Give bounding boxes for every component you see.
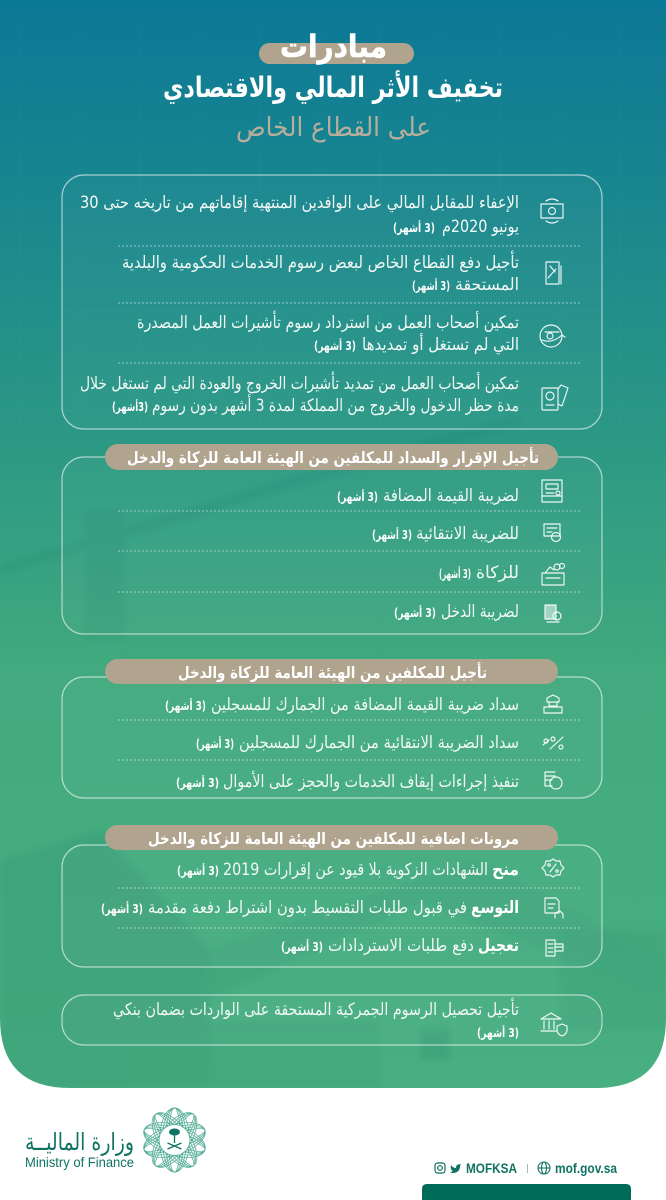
logo rosette (139, 1105, 210, 1175)
item: residency fee exemption (80, 193, 519, 237)
item: excise tax (372, 524, 519, 544)
logo arabic name: وزارة الماليــة (25, 1128, 134, 1156)
panel: customs deferral (62, 659, 602, 798)
item: refund requests: دفع طلبات الاستردادات (328, 936, 474, 956)
logo english name: Ministry of Finance (25, 1154, 134, 1170)
icon: hand with note (546, 262, 561, 284)
heading pill: تأجيل للمكلفين من الهيئة العامة للزكاة والدخل (178, 662, 487, 682)
panel: additional flexibility (62, 825, 602, 967)
icon: banknote cycle (541, 199, 563, 223)
item: income tax: (3 أشهر) (394, 605, 436, 620)
social handles (435, 1160, 617, 1176)
icon: document with coins (545, 605, 561, 622)
item: excise tax: للضريبة الانتقائية (416, 524, 519, 544)
item: zakat certificates: منح (492, 860, 519, 880)
item: zakat (439, 563, 519, 583)
heading pill (105, 659, 558, 684)
icon: globe (538, 1162, 550, 1174)
icon: percent badge (542, 859, 564, 877)
icon: checklist in hand (545, 898, 563, 918)
item: exit and re-entry visas: (3أشهر) (112, 399, 148, 414)
item: zakat certificates: (3 أشهر) (177, 863, 219, 878)
item: VAT payment: سداد ضريبة القيمة المضافة من الجمارك للمسجلين (211, 695, 519, 715)
item: refund requests (281, 936, 519, 956)
item: instalment requests: التوسع (471, 898, 519, 918)
heading pill: مرونات اضافية للمكلفين من الهيئة العامة للزكاة والدخل (148, 829, 519, 848)
item: exit and re-entry visas (80, 371, 519, 416)
icon: percent (543, 737, 563, 749)
subtitle: على القطاع الخاص (236, 113, 431, 143)
icon: bank with shield (541, 1013, 567, 1036)
item: zakat certificates: الشهادات الزكوية بلا قيود عن إقرارات 2019 (223, 860, 488, 880)
item: residency fee exemption: (3 أشهر) (393, 220, 435, 235)
logo: ministry of finance (25, 1105, 210, 1175)
item: value added tax: (3 أشهر) (337, 489, 378, 504)
item: government fees deferral: المستحقة (455, 275, 519, 295)
title word: مبادرات (280, 29, 387, 65)
icon: passport and ticket (542, 385, 568, 410)
item: government fees deferral: (3 أشهر) (412, 278, 450, 293)
item: VAT payment: (3 أشهر) (165, 698, 206, 713)
icon: desk with plant (542, 564, 564, 585)
icon: form and gear (544, 524, 560, 542)
item: value added tax (337, 486, 519, 506)
item: income tax (394, 602, 519, 622)
icon: twitter (450, 1164, 461, 1173)
heading pill (105, 825, 558, 850)
item: zakat: للزكاة (476, 563, 519, 583)
item: work visa refund: تمكين أصحاب العمل من استرداد رسوم تأشيرات العمل المصدرة (137, 310, 519, 333)
item: instalment requests: في قبول طلبات التقسيط بدون اشتراط دفعة مقدمة (148, 898, 467, 918)
item: income tax: لضريبة الدخل (441, 602, 519, 622)
item: work visa refund: (3 أشهر) (314, 338, 356, 353)
item: suspension of measures: (3 أشهر) (176, 775, 219, 790)
title block (163, 29, 503, 143)
item: refund requests: تعجيل (478, 936, 519, 956)
icon: instagram (435, 1163, 445, 1173)
item: excise payment: (3 أشهر) (196, 736, 234, 751)
item: excise payment: سداد الضريبة الانتقائية من الجمارك للمسجلين (239, 733, 519, 753)
icon: customs desk (544, 695, 562, 713)
item: refund requests: (3 أشهر) (281, 939, 323, 954)
panel: customs duties (62, 995, 602, 1045)
item: work visa refund: التي لم تستغل أو تمديدها (362, 333, 519, 355)
item: work visa refund (137, 310, 519, 355)
item: zakat: (3 أشهر) (439, 566, 471, 581)
item: exit and re-entry visas: مدة حظر الدخول والخروج من المملكة لمدة 3 أشهر بدون رسوم (152, 394, 519, 416)
item: customs duties deferral: تأجيل تحصيل الرسوم الجمركية المستحقة على الواردات بضمان بنكي (113, 997, 519, 1020)
item: suspension of measures: تنفيذ إجراءات إيقاف الخدمات والحجز على الأموال (223, 771, 519, 792)
item: residency fee exemption: الإعفاء للمقابل المالي على الوافدين المنتهية إقاماتهم من تاريخه حتى 30 (80, 193, 519, 213)
item: residency fee exemption: يونيو 2020م (442, 217, 519, 237)
icon: calculator (542, 480, 562, 502)
item: instalment requests: (3 أشهر) (101, 901, 143, 916)
item: government fees deferral (122, 250, 519, 295)
item: government fees deferral: تأجيل دفع القطاع الخاص لبعض رسوم الخدمات الحكومية والبلدية (122, 250, 519, 273)
item: customs duties deferral: (3 أشهر) (477, 1025, 519, 1040)
heading pill: تأجيل الإقرار والسداد للمكلفين من الهيئة العامة للزكاة والدخل (127, 447, 539, 467)
item: customs duties deferral (113, 997, 519, 1040)
item: value added tax: لضريبة القيمة المضافة (383, 486, 519, 506)
panel: initiatives (62, 175, 602, 429)
title pill (259, 43, 414, 64)
icon: coin stack (545, 772, 562, 789)
footer tab (422, 1184, 631, 1200)
icon: coin refund (540, 325, 565, 347)
panel: declaration deferral (62, 444, 602, 634)
item: excise tax: (3 أشهر) (372, 527, 412, 542)
main title: تخفيف الأثر المالي والاقتصادي (163, 70, 503, 104)
item: exit and re-entry visas: تمكين أصحاب العمل من تمديد تأشيرات الخروج والعودة التي لم تستغل خلال (80, 371, 519, 394)
heading pill (105, 444, 558, 470)
handle: MOFKSA (466, 1160, 517, 1176)
website: mof.gov.sa (555, 1160, 617, 1176)
icon: card terminal (546, 940, 563, 956)
